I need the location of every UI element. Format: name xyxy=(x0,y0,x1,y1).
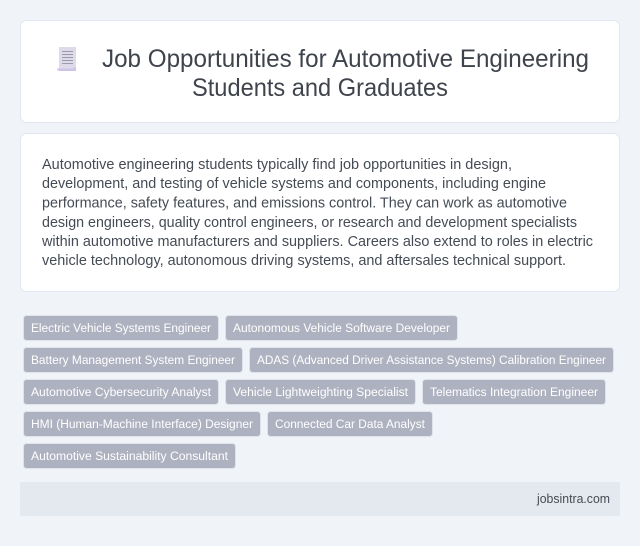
tag: Connected Car Data Analyst xyxy=(268,412,432,436)
description text xyxy=(41,157,593,269)
tag: Autonomous Vehicle Software Developer xyxy=(226,316,458,340)
description text: within automotive manufacturers and suppliers. Careers also extend to roles in electric xyxy=(41,234,593,250)
description text: performance, safety features, and emissions control. They can work as automotive xyxy=(42,196,567,212)
title xyxy=(102,45,589,102)
tag: Connected Car Data Analyst: Connected Car Data Analyst xyxy=(275,417,426,431)
tag: Vehicle Lightweighting Specialist xyxy=(226,380,416,404)
tag: Battery Management System Engineer xyxy=(24,348,242,372)
tag: Telematics Integration Engineer xyxy=(422,380,606,404)
tag: Autonomous Vehicle Software Developer: Autonomous Vehicle Software Developer xyxy=(233,321,450,335)
description text: Automotive engineering students typically find job opportunities in design, xyxy=(42,157,512,173)
title: Students and Graduates xyxy=(192,74,448,102)
tag: HMI Designer xyxy=(24,412,260,436)
job tags xyxy=(24,316,614,468)
tag: Automotive Sustainability Consultant xyxy=(24,444,236,468)
tag: Electric Vehicle Systems Engineer: Electric Vehicle Systems Engineer xyxy=(31,321,211,335)
tag: Battery Management System Engineer: Battery Management System Engineer xyxy=(31,353,235,367)
tag: Electric Vehicle Systems Engineer xyxy=(24,316,218,340)
icon: document scroll xyxy=(57,47,76,71)
tag: Automotive Cybersecurity Analyst xyxy=(24,380,218,404)
description text: development, and testing of vehicle systems and components, including engine xyxy=(42,176,546,192)
description text: vehicle technology, autonomous driving systems, and aftersales technical support. xyxy=(42,253,566,269)
tag: ADAS Calibration Engineer xyxy=(250,348,614,372)
tag: ADAS Calibration Engineer: ADAS (Advanced Driver Assistance Systems) Calibration Engineer xyxy=(257,353,606,367)
tag: Automotive Cybersecurity Analyst: Automotive Cybersecurity Analyst xyxy=(31,385,212,399)
tag: HMI Designer: HMI (Human-Machine Interface) Designer xyxy=(31,417,253,431)
header panel xyxy=(20,20,620,122)
panel: description xyxy=(20,134,620,292)
footer xyxy=(20,482,620,516)
footer source text: jobsintra.com xyxy=(536,492,610,506)
description text: design engineers, quality control engineers, or research and development specialists xyxy=(42,215,577,231)
title: Job Opportunities for Automotive Engineering xyxy=(102,45,589,73)
tag: Vehicle Lightweighting Specialist: Vehicle Lightweighting Specialist xyxy=(233,385,409,399)
tag: Telematics Integration Engineer: Telematics Integration Engineer xyxy=(430,385,598,399)
tag: Automotive Sustainability Consultant: Automotive Sustainability Consultant xyxy=(31,449,229,463)
